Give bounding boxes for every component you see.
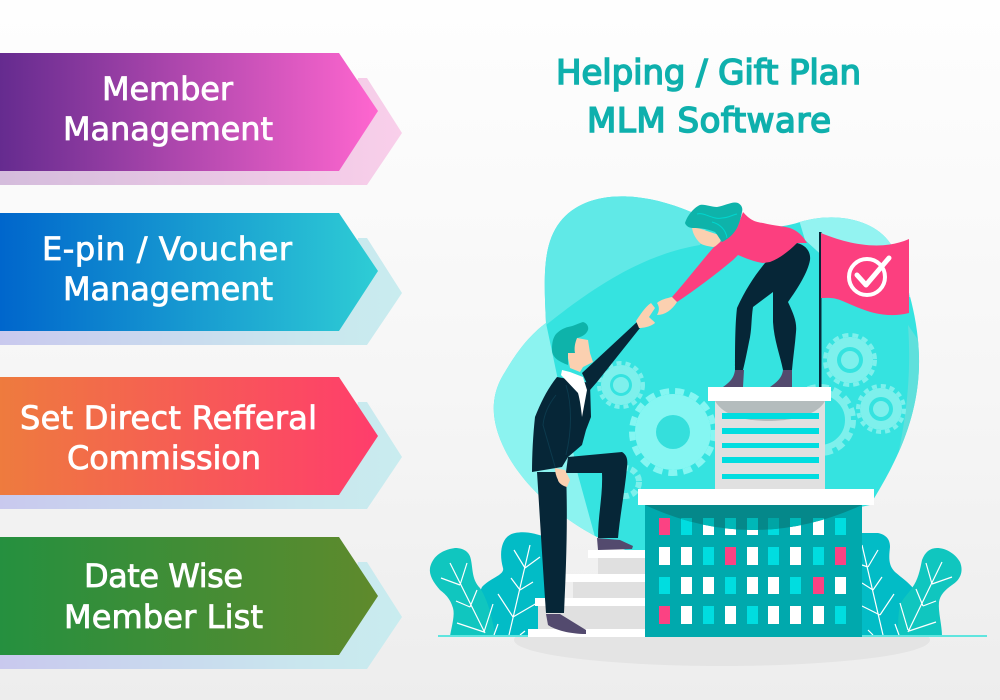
gear: large centre [632, 391, 714, 473]
gear: upper right [825, 335, 875, 385]
arrow: date wise member list [0, 537, 402, 669]
arrow: e-pin voucher management: E-pin / Voucher [42, 230, 293, 268]
legs [735, 243, 810, 370]
plants [430, 532, 962, 636]
title [556, 53, 861, 141]
gears [599, 335, 904, 496]
background blob [480, 190, 930, 555]
title: MLM Software [587, 101, 831, 141]
arrow: e-pin voucher management: Management [63, 270, 273, 308]
arrow: e-pin voucher management [0, 213, 402, 345]
raised hand [636, 303, 655, 328]
arrow: date wise member list: Member List [64, 598, 263, 636]
plant: far right [895, 548, 962, 636]
plant: right inner [862, 533, 913, 636]
gear: small left [599, 363, 643, 407]
hand [657, 297, 677, 315]
torso and arm [672, 212, 807, 302]
gear: lower right [858, 386, 904, 432]
hair waves [697, 214, 737, 238]
hair [685, 203, 742, 242]
shoes [546, 538, 633, 634]
arrow: set direct referral commission [0, 377, 402, 509]
arrow: member management: Management [63, 110, 273, 148]
hair [552, 322, 588, 365]
shirt [561, 370, 587, 417]
flag [819, 232, 909, 387]
ground shadow [514, 614, 930, 666]
arm [582, 322, 640, 390]
face and neck [567, 338, 593, 372]
man climbing stairs [532, 303, 655, 634]
jacket [532, 377, 591, 472]
ground line [438, 635, 987, 637]
gear: behind tower [787, 387, 853, 453]
arrow: member management [0, 53, 402, 185]
boots [723, 370, 792, 387]
gear: small low [611, 468, 639, 496]
arrow: date wise member list: Date Wise [84, 557, 243, 595]
arrow: set direct referral commission: Set Direct Refferal [20, 399, 317, 437]
arrow: member management: Member [102, 70, 234, 108]
standing and raised leg [537, 452, 627, 613]
building with windows [638, 489, 874, 637]
arrow: set direct referral commission: Commission [67, 439, 261, 477]
plant: far left [430, 548, 498, 636]
hand on knee [555, 468, 570, 487]
stairs [528, 550, 645, 637]
tower [708, 387, 831, 489]
jacket seams [543, 385, 570, 470]
face [692, 226, 722, 247]
title: Helping / Gift Plan [556, 53, 861, 93]
woman reaching down [657, 203, 810, 387]
plant: left tall [478, 532, 548, 636]
